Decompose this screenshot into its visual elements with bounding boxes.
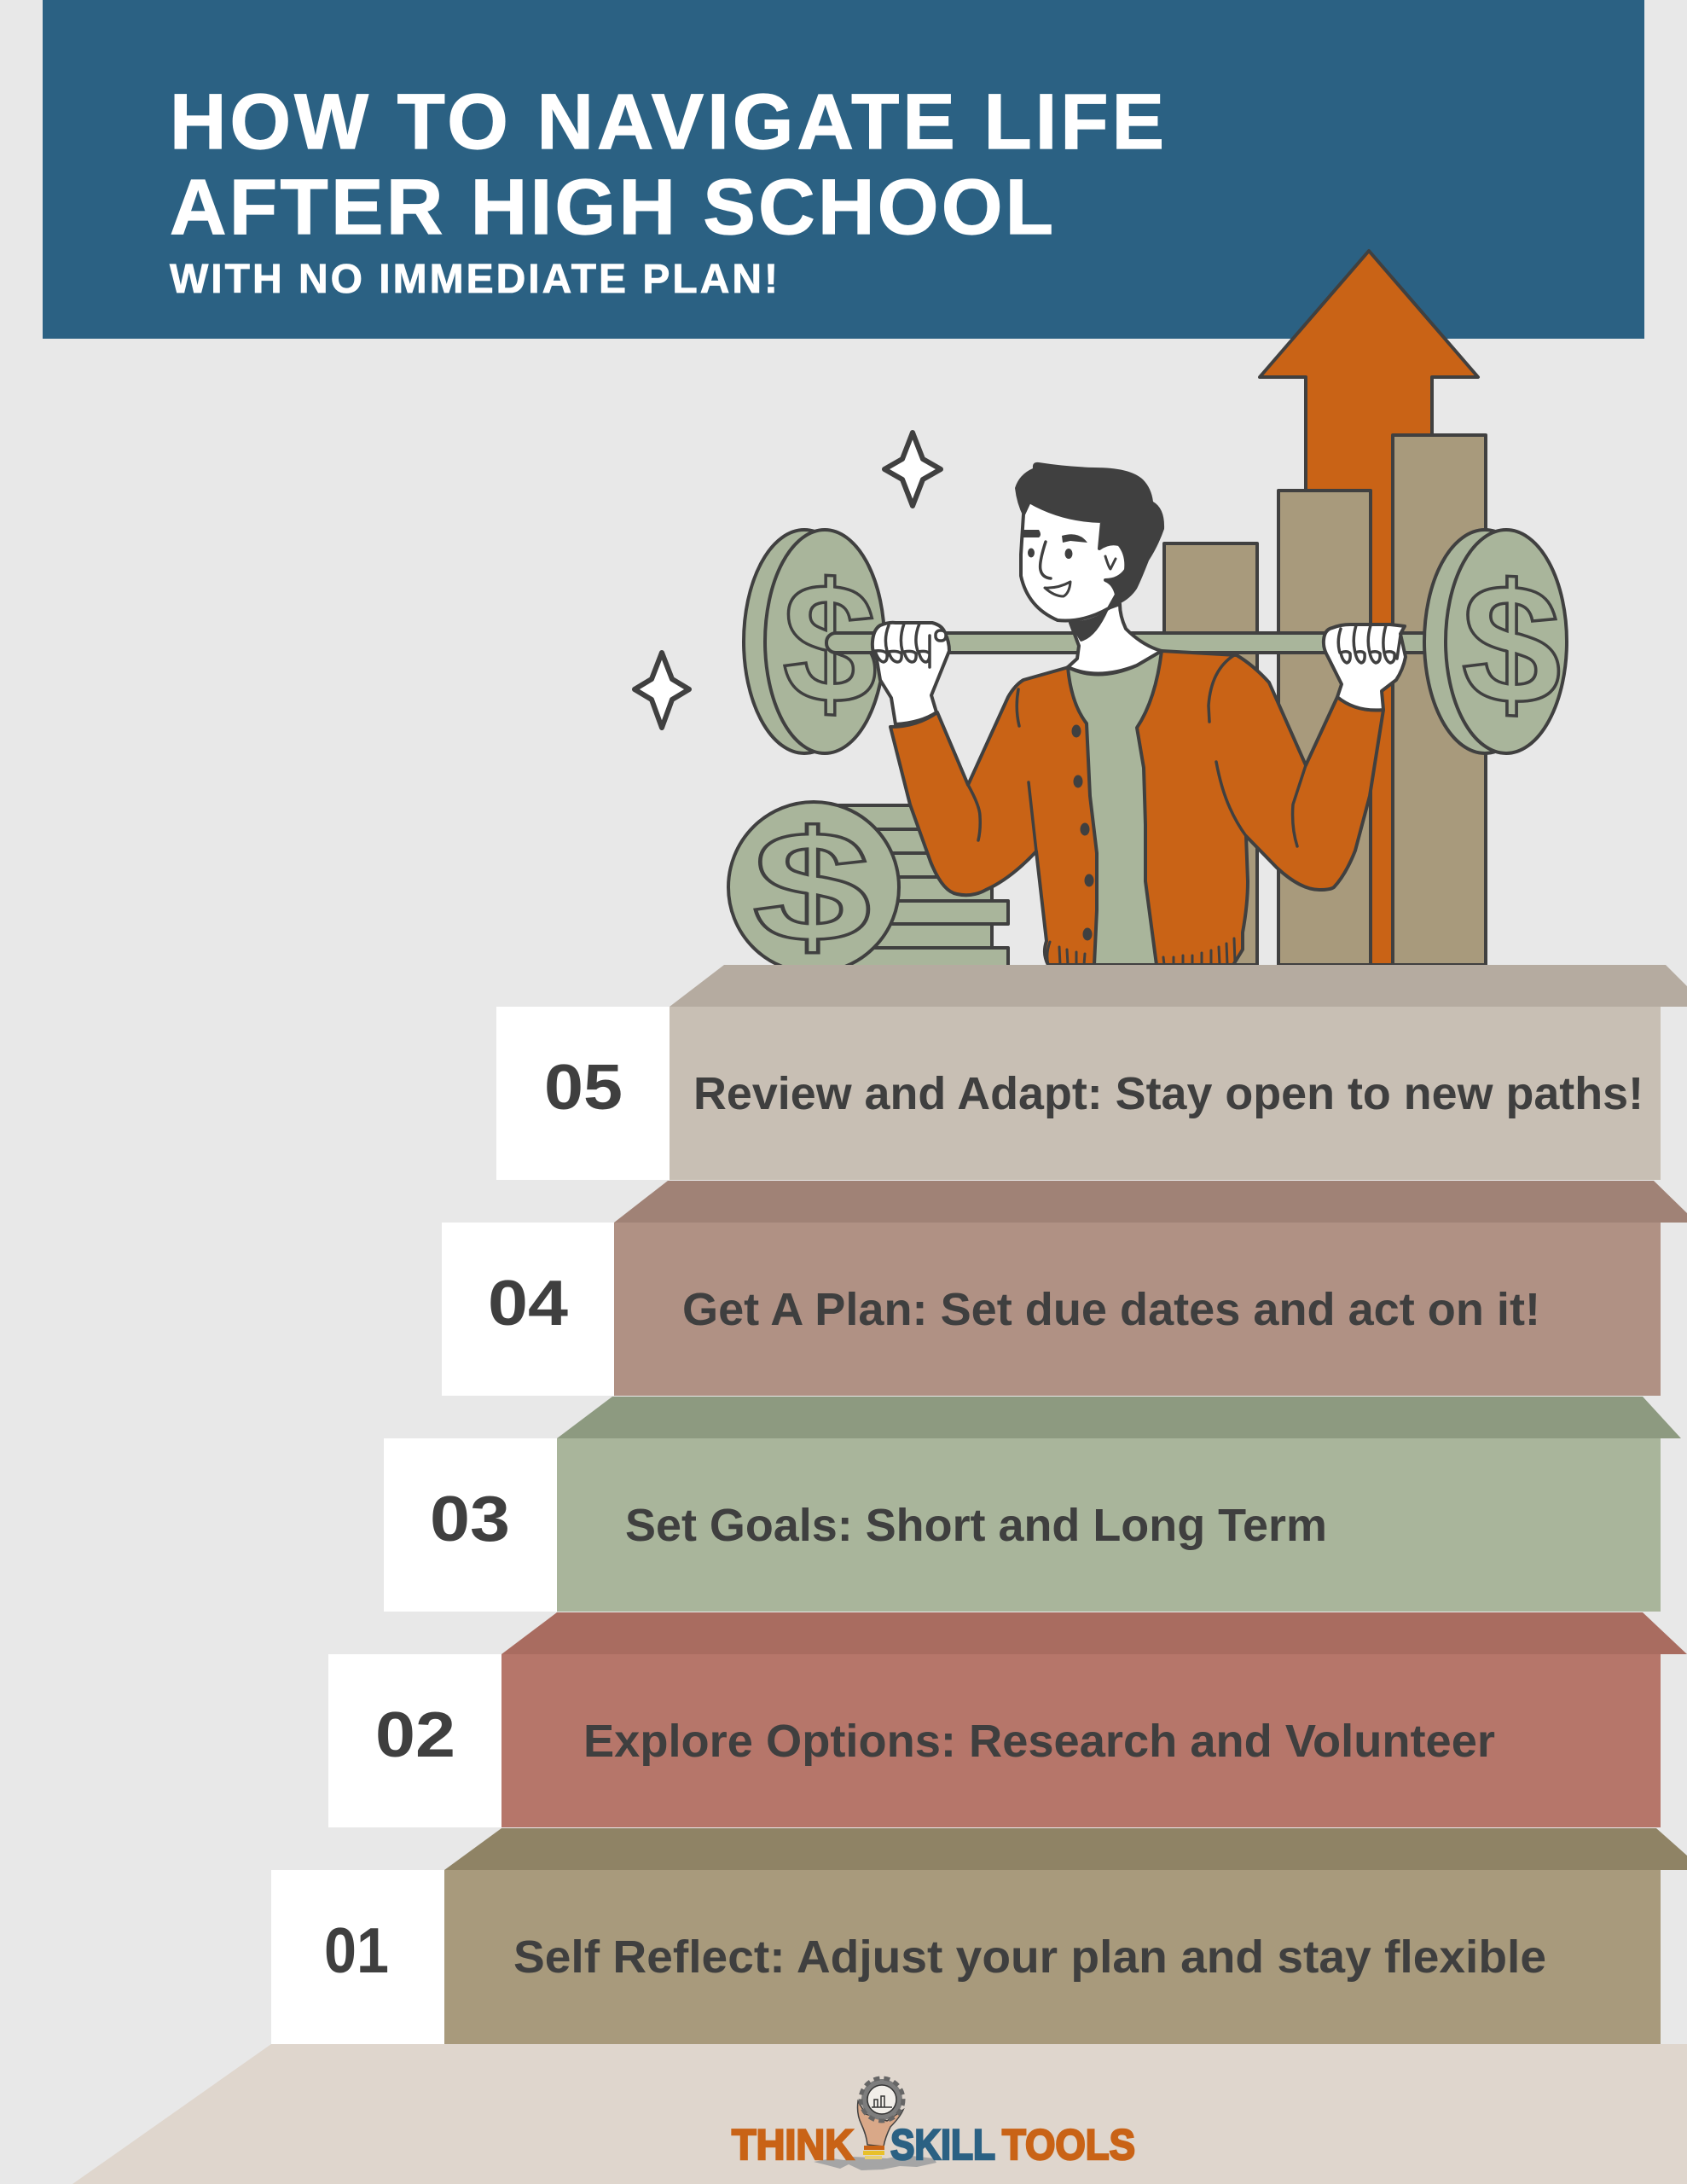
step 05 — [496, 965, 1687, 1180]
number box 01 — [271, 1870, 444, 2044]
left hand — [872, 623, 949, 724]
nose — [1041, 542, 1051, 578]
barbell right plate: $ — [1462, 547, 1561, 742]
step text 03: Set Goals: Short and Long Term — [625, 1500, 1327, 1551]
hair back — [1015, 462, 1164, 623]
mouth — [1045, 582, 1070, 596]
ear detail — [1105, 556, 1116, 569]
eyes — [1028, 548, 1073, 559]
logo: TOOLS — [1002, 2121, 1135, 2169]
shirt — [1068, 651, 1162, 965]
icon: sparkle left — [635, 653, 689, 728]
number box 05 — [496, 1007, 670, 1180]
icon: coin stack: $ — [753, 798, 871, 975]
cardigan seams — [968, 655, 1306, 851]
number box 02 — [328, 1654, 501, 1827]
barbell bar — [826, 633, 1432, 653]
icon: coin stack — [728, 798, 1008, 975]
face — [1021, 502, 1126, 620]
step 01 — [271, 1828, 1687, 2044]
barbell left plate — [744, 530, 884, 753]
eyebrow left — [1023, 530, 1041, 537]
barbell right plate — [1424, 530, 1567, 753]
logo shadow — [814, 2155, 936, 2170]
title: HOW TO NAVIGATE LIFE — [170, 78, 1164, 166]
cardigan buttons — [1071, 725, 1093, 940]
logo — [732, 2078, 1135, 2170]
number box 03 — [384, 1438, 557, 1612]
eyebrow right — [1062, 534, 1087, 543]
illustration: person — [872, 462, 1406, 965]
step 03 — [384, 1397, 1681, 1612]
cardigan — [890, 651, 1383, 965]
step text 01: Self Reflect: Adjust your plan and stay flexible — [513, 1931, 1546, 1983]
number box 02: 02 — [375, 1699, 455, 1770]
logo socket — [863, 2146, 884, 2159]
step text 04: Get A Plan: Set due dates and act on it! — [682, 1284, 1540, 1335]
ground base — [72, 2044, 1687, 2184]
logo bulb hand — [858, 2101, 903, 2146]
title: AFTER HIGH SCHOOL — [170, 164, 1053, 251]
logo: SKILL — [890, 2121, 995, 2169]
illustration: growth arrow and bars — [1164, 251, 1486, 965]
step 04 — [442, 1181, 1687, 1396]
right hand — [1324, 624, 1406, 710]
step 02 — [328, 1612, 1687, 1827]
number box 04: 04 — [488, 1267, 568, 1339]
step text 05: Review and Adapt: Stay open to new paths! — [693, 1068, 1644, 1119]
title — [170, 78, 1164, 251]
beard shadow — [1070, 609, 1109, 642]
subtitle: WITH NO IMMEDIATE PLAN! — [170, 257, 778, 302]
neck — [1068, 604, 1162, 674]
header banner — [43, 0, 1644, 339]
number box 03: 03 — [430, 1483, 510, 1554]
logo gear — [861, 2078, 903, 2121]
step text 02: Explore Options: Research and Volunteer — [583, 1716, 1495, 1767]
number box 05: 05 — [544, 1051, 623, 1123]
barbell left plate: $ — [782, 546, 878, 741]
cardigan ribbing — [1047, 938, 1235, 965]
logo wordmark: THINK — [732, 2121, 854, 2169]
icon: sparkle top — [884, 433, 941, 506]
number box 01: 01 — [324, 1914, 389, 1986]
number box 04 — [442, 1223, 614, 1396]
